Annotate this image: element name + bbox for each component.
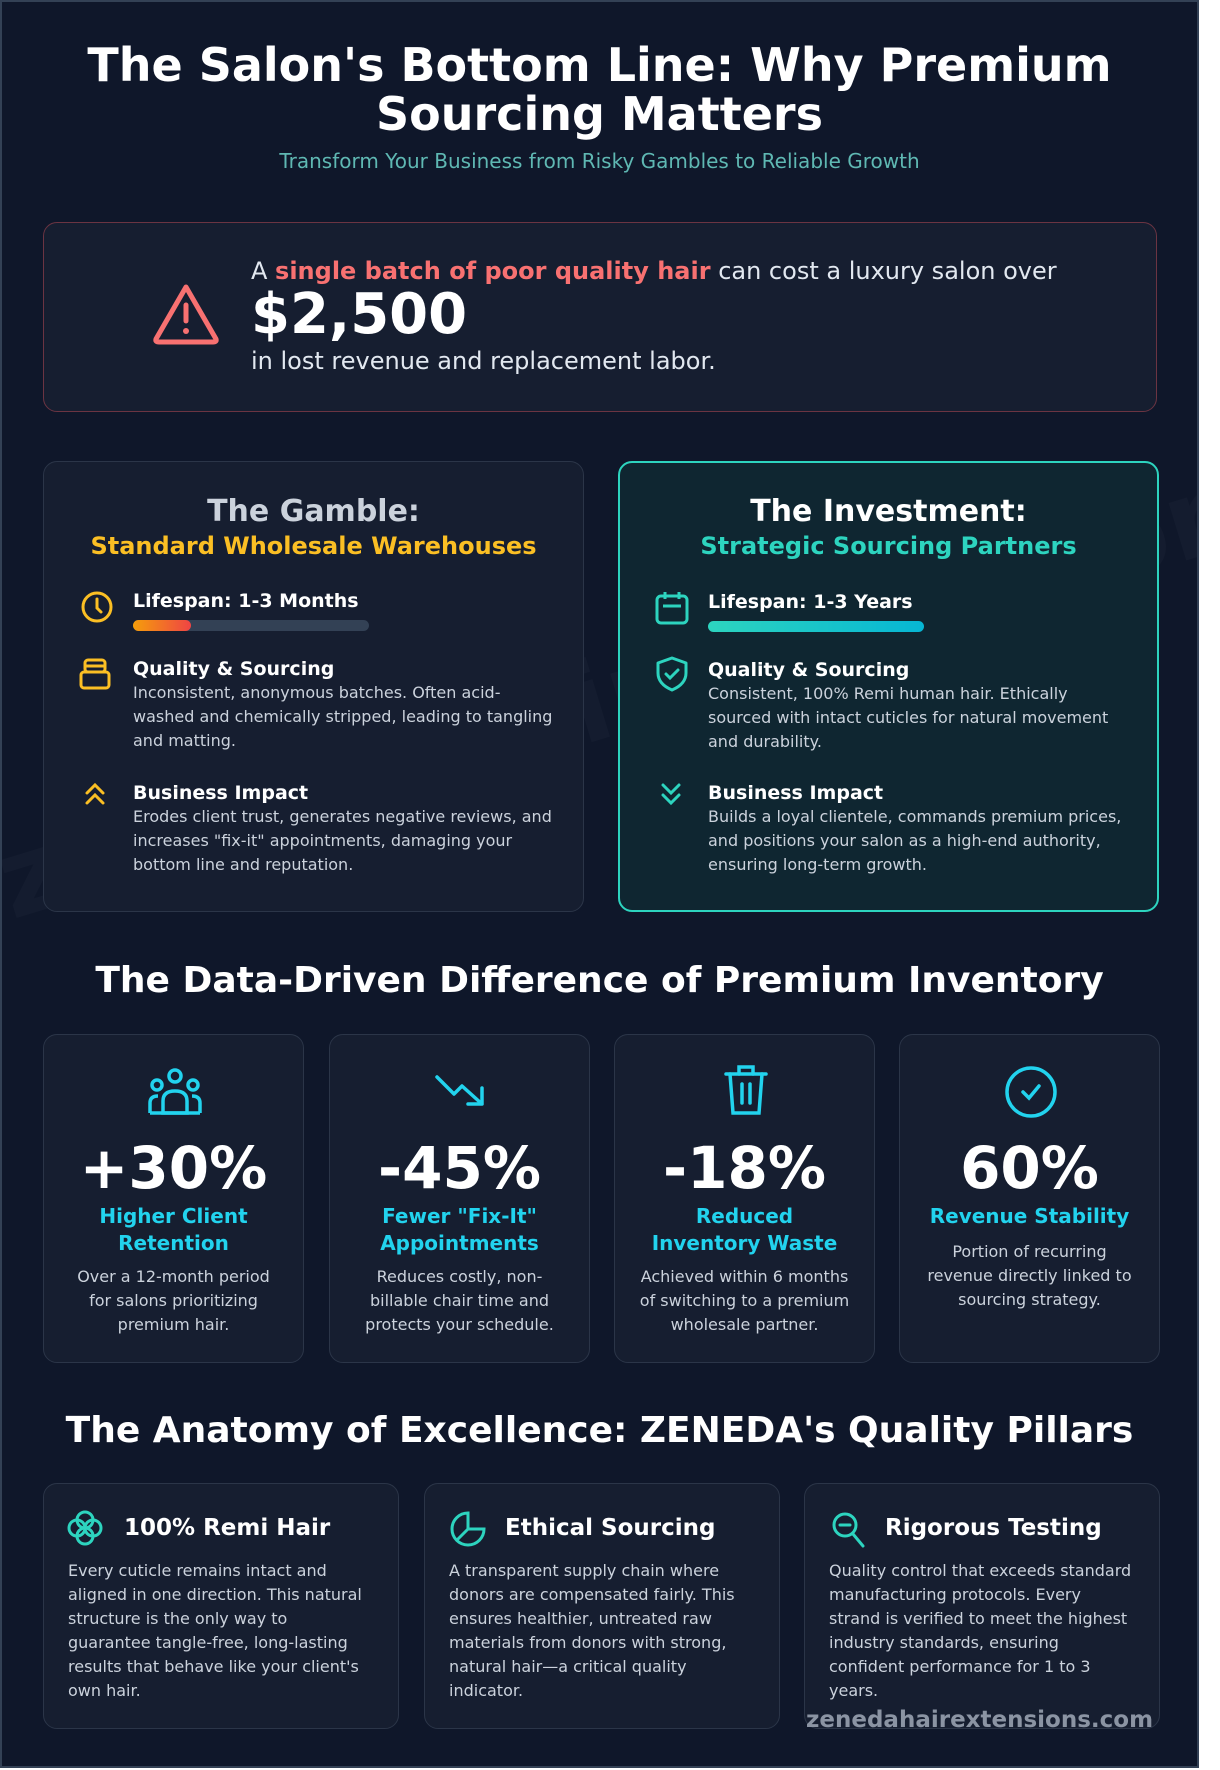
description: Achieved within 6 months of switching to a premium wholesale partner.: [640, 1267, 849, 1334]
bar: long lifespan: [708, 621, 924, 632]
icon: magnifier: [832, 1512, 865, 1548]
label: Higher Client: [99, 1204, 248, 1228]
description: Portion of recurring revenue directly linked to sourcing strategy.: [927, 1242, 1132, 1309]
body: A transparent supply chain where donors are compensated fairly. This ensures healthier, untreated raw materials from donors with strong, natural hair—a critical quality indicator.: [449, 1561, 735, 1700]
label: [652, 1204, 837, 1255]
alert text: in lost revenue and replacement labor.: [251, 347, 716, 375]
pillar: testing: [804, 1483, 1160, 1729]
icon: shield check: [656, 656, 688, 692]
heading: anatomy: The Anatomy of Excellence: ZENEDA's Quality Pillars: [66, 1410, 1133, 1451]
title: Rigorous Testing: [885, 1515, 1102, 1541]
label: Appointments: [380, 1231, 539, 1255]
title: [87, 38, 1112, 141]
subtitle: Transform Your Business from Risky Gambles to Reliable Growth: [279, 149, 920, 173]
number: -18%: [663, 1134, 826, 1202]
body: Every cuticle remains intact and aligned in one direction. This natural structure is the only way to guarantee tangle-free, long-lasting results that behave like your client's own hair.: [68, 1561, 362, 1700]
business impact: Business Impact: [708, 782, 883, 804]
heading: gamble: Standard Wholesale Warehouses: [90, 532, 537, 560]
heading: investment: [700, 494, 1077, 560]
icon: trash: [724, 1065, 768, 1115]
number: -45%: [378, 1134, 541, 1202]
business impact: Builds a loyal clientele, commands premium prices, and positions your salon as a high-end authority, ensuring long-term growth.: [708, 807, 1121, 874]
title: Ethical Sourcing: [505, 1515, 715, 1541]
bar: short lifespan: [133, 620, 369, 631]
panel: cost alert: [43, 222, 1157, 412]
quality & sourcing: Inconsistent, anonymous batches. Often acid-washed and chemically stripped, leading to tangling and matting.: [133, 683, 552, 750]
lifespan: Lifespan: 1-3 Months: [133, 590, 359, 612]
panel: the gamble: [43, 461, 584, 912]
stat card: fix-it: [329, 1034, 590, 1363]
icon: warning triangle: [153, 284, 219, 344]
icon: people: [148, 1068, 202, 1115]
pillar: ethical: [424, 1483, 780, 1729]
stat card: revenue: [899, 1034, 1160, 1363]
heading: investment: The Investment:: [750, 494, 1027, 529]
icon: calendar: [656, 592, 688, 624]
icon: chevrons down: [661, 783, 681, 805]
quality & sourcing: Quality & Sourcing: [708, 659, 909, 681]
label: Revenue Stability: [930, 1204, 1129, 1228]
label: [99, 1204, 248, 1255]
quality & sourcing: Consistent, 100% Remi human hair. Ethically sourced with intact cuticles for natural movement and durability.: [708, 684, 1108, 751]
number: +30%: [80, 1134, 267, 1202]
icon: check circle: [1005, 1066, 1057, 1118]
lifespan: Lifespan: 1-3 Years: [708, 591, 913, 613]
description: Reduces costly, non-billable chair time and protects your schedule.: [365, 1267, 554, 1334]
title: 100% Remi Hair: [124, 1515, 330, 1541]
title: The Salon's Bottom Line: Why Premium: [87, 38, 1112, 92]
icon: trend down: [435, 1075, 484, 1106]
label: Reduced: [696, 1204, 793, 1228]
icon: globe-ish: [450, 1512, 486, 1546]
icon: chevrons up: [85, 783, 105, 805]
business impact: Erodes client trust, generates negative reviews, and increases "fix-it" appointments, damaging your bottom line and reputation.: [133, 807, 552, 874]
alert text: A single batch of poor quality hair can cost a luxury salon over: [251, 257, 1057, 285]
label: Fewer "Fix-It": [382, 1204, 537, 1228]
watermark: website: zenedahairextensions.com: [806, 1707, 1153, 1733]
quality & sourcing: Quality & Sourcing: [133, 658, 334, 680]
title: Sourcing Matters: [376, 87, 823, 141]
body: Quality control that exceeds standard manufacturing protocols. Every strand is verified to meet the highest industry standards, ensuring confident performance for 1 to 3 years.: [829, 1561, 1131, 1700]
number: 60%: [960, 1134, 1099, 1202]
label: Retention: [118, 1231, 229, 1255]
icon: clock: [82, 592, 112, 622]
icon: strands: [68, 1510, 102, 1546]
heading: gamble: The Gamble:: [207, 494, 420, 529]
label: [380, 1204, 539, 1255]
stat card: retention: [43, 1034, 304, 1363]
heading: investment: Strategic Sourcing Partners: [700, 532, 1077, 560]
label: Inventory Waste: [652, 1231, 837, 1255]
heading: gamble: [90, 494, 537, 560]
pillar: remi hair: [43, 1483, 399, 1729]
panel: the investment: [618, 461, 1159, 912]
alert text: $2,500: [251, 282, 467, 347]
alert text: [251, 257, 1057, 375]
stat card: waste: [614, 1034, 875, 1363]
icon: box: [80, 658, 110, 690]
heading: data-driven: The Data-Driven Difference of Premium Inventory: [95, 960, 1104, 1001]
business impact: Business Impact: [133, 782, 308, 804]
description: Over a 12-month period for salons prioritizing premium hair.: [77, 1267, 270, 1334]
